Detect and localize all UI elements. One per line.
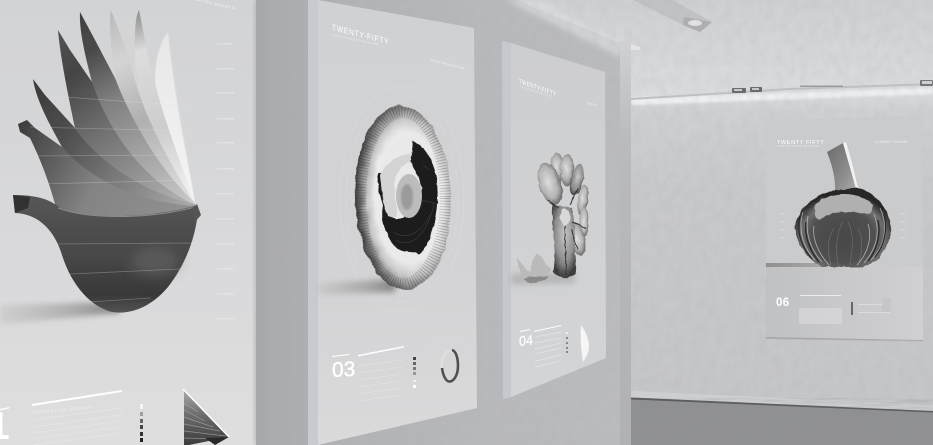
garlic shade: [524, 276, 548, 283]
poster 3 caption rule: [534, 325, 561, 332]
mushroom radial hatch: [360, 112, 446, 284]
poster 2 face: [318, 0, 477, 445]
mushroom stalk: [396, 174, 422, 218]
bowl rim: [58, 207, 195, 217]
poster 1 pyramid chart: [183, 389, 229, 445]
mushroom cap: [352, 104, 454, 292]
poster 2: food production: [308, 0, 477, 445]
poster 4 chart: [858, 298, 891, 313]
poster 3 number rule: [520, 329, 530, 332]
left wall: [250, 0, 635, 445]
poster 1 shadow: [0, 302, 120, 324]
poster 1 year labels: [217, 43, 234, 320]
stem dark tip: [13, 195, 30, 213]
poster 4 legend: [851, 302, 853, 315]
poster 3 side: [502, 41, 511, 399]
baseboard: [631, 391, 933, 412]
succulent top petals: [550, 153, 564, 183]
poster 3 legend: [566, 332, 568, 353]
poster 3: water: [502, 41, 606, 399]
succulent dark folds: [548, 188, 586, 275]
mushroom white ring: [378, 131, 442, 263]
mushroom stalk detail: [401, 184, 413, 210]
succulent stem: [552, 205, 577, 277]
poster 2 number rule: [332, 354, 349, 357]
poster 1 face: [0, 0, 256, 445]
poster 3 face: [511, 43, 606, 397]
poster 4 side labels: [779, 213, 906, 238]
overlay lines: [30, 96, 195, 302]
track lights: [631, 80, 933, 100]
poster 2 topic: FOOD PRODUCTION: [431, 58, 465, 71]
wall light strip: [631, 88, 933, 105]
artichoke: [795, 142, 891, 267]
mushroom rings: [340, 86, 464, 312]
poster 4 title: TWENTY FIFTY: [777, 140, 825, 146]
artichoke stem: [827, 143, 859, 195]
stem highlight: [843, 142, 859, 192]
artichoke heart: [814, 194, 873, 220]
poster 4 drop shadow: [766, 337, 923, 341]
root tip: [192, 204, 201, 222]
petal 2: [33, 79, 195, 206]
mushroom stalk ring: [380, 154, 411, 218]
mushroom slice: [352, 104, 454, 292]
petal 1: [18, 120, 195, 222]
poster 1 legend: [140, 404, 143, 442]
petal 3: [58, 30, 195, 204]
ceiling light grille: [633, 0, 712, 32]
artichoke head: [795, 188, 891, 267]
poster 1 caption rule: [32, 390, 122, 406]
poster 3 number: 04: [519, 332, 534, 349]
poster 3 topic: WATER: [587, 101, 597, 107]
poster 2 title: TWENTY-FIFTY: [332, 22, 389, 47]
poster 1: population growth: [0, 0, 264, 445]
artichoke leaves: [801, 208, 885, 265]
petal 6: [135, 10, 195, 203]
mushroom gills: [378, 141, 438, 254]
ceiling: [517, 0, 933, 102]
right wall: [631, 90, 933, 412]
floor edge: [631, 398, 933, 412]
poster 1 caption: POPULATION GROWTH: [33, 405, 93, 415]
poster 2 body text: [358, 360, 402, 401]
poster 4 subtitle: FOUR FACTORS OF THE FUTURE: [777, 145, 819, 148]
poster 1 wall shadow: [256, 0, 264, 445]
bowl highlight: [131, 248, 179, 276]
poster 3 diamond chart: [581, 325, 589, 362]
succulent large petal: [533, 160, 567, 208]
poster 2 caption rule: [358, 346, 404, 356]
poster 3 subtitle: FOUR FACTORS OF THE FUTURE: [519, 85, 552, 98]
poster 1 number rule: [0, 407, 9, 410]
poster 3 title: TWENTY-FIFTY: [519, 79, 556, 98]
poster 4 topic: CLIMATE CHANGE: [875, 140, 908, 144]
poster 4 caption rule: [800, 295, 841, 296]
poster 2 number: 03: [332, 358, 355, 382]
artichoke dark leaves: [799, 214, 886, 262]
succulent centre: [560, 209, 570, 225]
wall texture: [250, 0, 933, 445]
poster 2 ring chart: [425, 337, 473, 399]
petal 7: [155, 32, 195, 203]
poster 2 side: [308, 0, 318, 445]
poster 1 body text: [33, 408, 122, 445]
petal 5: [110, 10, 195, 203]
succulent: [517, 153, 590, 283]
bowl: [13, 195, 198, 313]
poster 4 upper face: [766, 116, 923, 267]
poster 4 number: 06: [776, 297, 789, 309]
poster 2 subtitle: FOUR FACTORS OF THE FUTURE: [332, 33, 379, 46]
garlic husk: [517, 253, 551, 283]
mushroom shadow: [318, 279, 395, 295]
artichoke core lines: [828, 222, 862, 265]
onion sculpture: [13, 10, 201, 313]
shelf shadow: [766, 263, 821, 267]
poster 3 body text: [535, 332, 561, 367]
poster 4 body text: [799, 308, 842, 324]
left wall top glow: [505, 0, 622, 58]
poster 2 legend: [413, 357, 416, 388]
column: [620, 41, 640, 445]
poster 4: climate change: [766, 116, 923, 341]
petal 4: [80, 12, 195, 203]
floor texture: [631, 398, 933, 445]
poster 4 lower face: [766, 267, 923, 340]
floor: [631, 398, 933, 445]
succulent shadow: [511, 272, 575, 285]
gill lines: [393, 165, 437, 243]
